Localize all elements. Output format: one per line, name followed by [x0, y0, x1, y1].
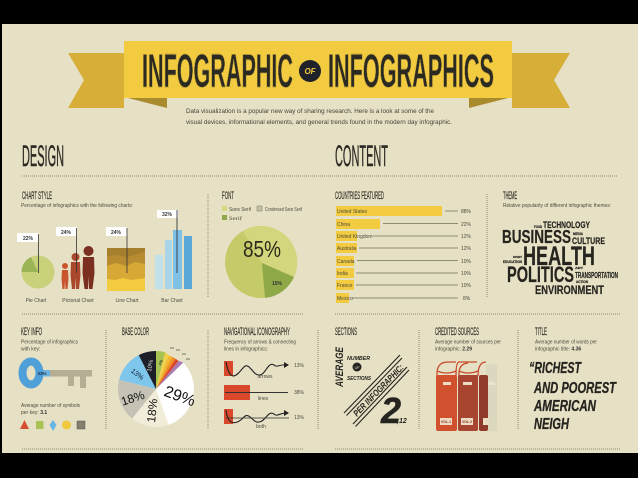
icon: books: VOL.1: [441, 420, 451, 424]
symbols: [20, 420, 85, 431]
base color pie chart: 2%: [186, 357, 191, 361]
panel: countries featured: United States: [337, 209, 368, 215]
panel: countries featured: 22%: [461, 222, 472, 228]
word cloud: SPORT: [513, 255, 522, 259]
arrows row: 13%: [294, 363, 305, 369]
panel: countries featured: 10%: [461, 283, 472, 289]
panel: navigational iconography: Frequency of arrows & connecting: [224, 340, 296, 346]
lines row: 38%: [294, 390, 305, 396]
font pie chart: 85%: [243, 236, 281, 262]
title: OF: [304, 67, 317, 76]
panel: countries featured: 8%: [463, 296, 471, 302]
base color pie chart: 4%: [157, 358, 164, 366]
base color pie chart: 2%: [182, 352, 187, 356]
font pie chart: 15%: [272, 281, 283, 287]
panel: theme: THEME: [503, 190, 517, 202]
title quote: AMERICAN: [533, 398, 597, 415]
title quote: “RICHEST: [529, 360, 582, 377]
panel: countries featured: 12%: [461, 234, 472, 240]
font legend: Serif: [229, 217, 242, 222]
pictorial chart: [56, 227, 94, 304]
base color pie chart: 18%: [119, 388, 147, 409]
panel: countries featured: 10%: [461, 271, 472, 277]
panel: navigational iconography: [224, 326, 305, 430]
panel: font: [222, 190, 302, 298]
word cloud: CULTURE: [572, 236, 605, 247]
bar chart: [155, 210, 192, 304]
line chart: Line Chart: [115, 298, 139, 304]
panel: navigational iconography: lines in infographics:: [224, 346, 268, 352]
typographic stat: [334, 347, 409, 431]
typographic stat: SECTIONS: [347, 376, 372, 382]
panel: credited sources: CREDITED SOURCES: [435, 326, 479, 338]
intro text: visual devices, informational elements, and general trends found in the modern day infographic.: [186, 119, 452, 126]
lines row: [224, 385, 305, 402]
panel: base color: BASE COLOR: [122, 326, 149, 338]
panel: sections: [334, 326, 409, 431]
base color pie chart: 18%: [144, 398, 161, 423]
icon: books: [436, 362, 497, 431]
panel: title: [529, 326, 617, 433]
panel: countries featured: Mexico: [337, 296, 353, 302]
panel: key info: [20, 326, 92, 431]
word cloud: POLITICS: [507, 262, 574, 287]
word cloud: ART: [575, 266, 583, 270]
title quote: NEIGH: [534, 416, 570, 433]
font legend: [222, 206, 302, 222]
intro text: Data visualization is a popular new way of sharing research. Here is a look at some of the: [186, 108, 434, 115]
panel: sections: SECTIONS: [335, 326, 357, 338]
word cloud: ACTION: [576, 280, 588, 284]
base color pie chart: 13%: [129, 368, 145, 382]
word cloud: TECHNOLOGY: [543, 220, 590, 230]
base color pie chart: 29%: [162, 383, 197, 410]
word cloud: ENVIRONMENT: [535, 283, 605, 297]
intro text: [186, 108, 452, 126]
panel: key info: KEY INFO: [21, 326, 42, 338]
panel: key info: Percentage of infographics: [21, 340, 78, 346]
panel: countries featured: 12%: [461, 246, 472, 252]
word cloud: [502, 220, 618, 297]
panel: countries featured: [335, 190, 472, 303]
pie chart: [17, 233, 54, 304]
typographic stat: AVERAGE: [334, 347, 346, 388]
line chart: 24%: [111, 230, 122, 236]
text: DESIGN: [22, 140, 64, 173]
panel: chart style: Percentage of infographics with the following charts:: [21, 203, 133, 209]
bar chart: Bar Chart: [161, 298, 183, 304]
panel: countries featured: 10%: [461, 259, 472, 265]
title: INFOGRAPHIC: [142, 44, 293, 97]
panel: countries featured: France: [337, 283, 353, 289]
panel: key info: with key:: [21, 346, 40, 352]
panel: credited sources: [435, 326, 501, 431]
both row: 13%: [294, 415, 305, 421]
bar chart: 32%: [162, 212, 173, 218]
pie chart: 22%: [23, 236, 34, 242]
typographic stat: PER INFOGRAPHIC:: [351, 363, 406, 418]
panel: title: Average number of words per: [535, 340, 597, 346]
pie chart: Pie Chart: [26, 298, 47, 304]
word cloud: EDUCATION: [503, 260, 522, 264]
font pie chart: [225, 226, 297, 298]
panel: font: FONT: [222, 190, 234, 202]
panel: key info: per key: 3.1: [21, 410, 47, 416]
panel: countries featured: China: [337, 222, 350, 228]
both row: [224, 409, 305, 430]
text: NAVIGATIONAL ICONOGRAPHY: [224, 326, 290, 338]
panel: title: infographic title: 4.36: [535, 346, 581, 352]
font legend: Condensed Sans Serif: [265, 207, 302, 213]
icon: books: VOL.2: [462, 420, 472, 424]
typographic stat: OF: [355, 366, 360, 370]
base color pie chart: 2%: [176, 348, 181, 352]
pictorial chart: 24%: [61, 230, 72, 236]
base color pie chart: 10%: [147, 359, 155, 372]
typographic stat: 2: [380, 390, 401, 431]
word cloud: BUSINESS: [502, 227, 571, 247]
panel: countries featured: Canada: [337, 259, 355, 265]
panel: theme: [502, 190, 618, 297]
typographic stat: ,12: [396, 418, 407, 425]
icon: key: 33%: [37, 371, 47, 376]
base color pie chart: [118, 346, 197, 427]
line chart: [106, 227, 145, 304]
arrows row: [224, 361, 305, 380]
pictorial chart: Pictorial Chart: [62, 298, 94, 304]
title quote: [529, 360, 617, 433]
word cloud: HEALTH: [523, 241, 595, 271]
typographic stat: NUMBER: [347, 356, 370, 362]
title: INFOGRAPHIC: [142, 44, 293, 97]
both row: both: [256, 424, 266, 430]
panel: countries featured: United Kingdom: [337, 234, 373, 240]
lines row: lines: [258, 396, 269, 402]
panel: credited sources: Average number of sources per: [435, 340, 501, 346]
banner: [68, 41, 570, 108]
base color pie chart: 2%: [170, 346, 175, 350]
panel: theme: Relative popularity of different infographic themes:: [503, 203, 611, 209]
panel: countries featured: India: [337, 271, 348, 277]
panel: chart style: [17, 190, 192, 304]
panel: key info: Average number of symbols: [21, 403, 80, 409]
panel: countries featured: Australia: [337, 246, 357, 252]
panel: base color: [118, 326, 197, 427]
font legend: Sans Serif: [229, 207, 252, 213]
word cloud: FOOD: [534, 225, 542, 229]
panel: countries featured: COUNTRIES FEATURED: [335, 190, 384, 202]
text: CONTENT: [335, 140, 388, 173]
panel: countries featured: 88%: [461, 209, 472, 215]
arrows row: arrows: [257, 374, 273, 380]
panel: title: TITLE: [535, 326, 547, 338]
word cloud: MEDIA: [573, 232, 583, 236]
panel: chart style: CHART STYLE: [22, 190, 52, 202]
panel: credited sources: infographic: 2.29: [435, 346, 472, 352]
